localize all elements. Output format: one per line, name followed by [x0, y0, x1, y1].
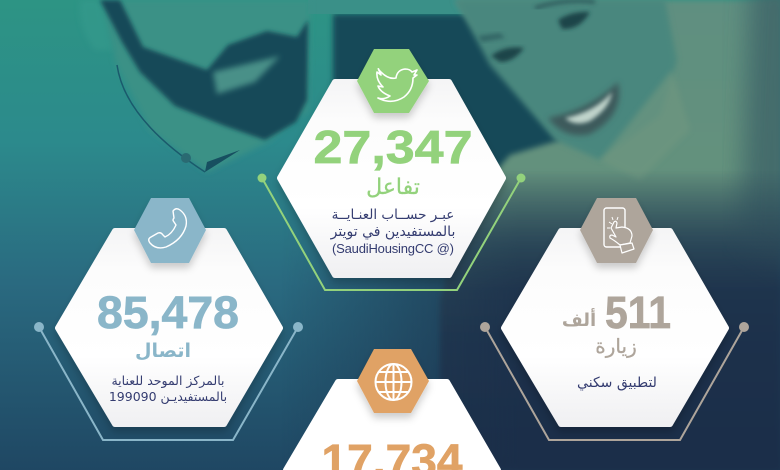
- card: Sakani app visits: [480, 198, 749, 440]
- window behind the people: [330, 14, 558, 168]
- icon: twitter bird: [357, 49, 429, 113]
- connector line blue: [34, 322, 303, 440]
- unit: ألف: [562, 308, 596, 331]
- white hexagon: [280, 82, 503, 275]
- label: تفاعل: [366, 175, 420, 200]
- woman: hijab, face and smile: [440, 0, 780, 470]
- man: face, beard and collar: [80, 0, 310, 172]
- description: بالمستفيدين في تويتر: [330, 224, 455, 240]
- white hexagon: [286, 382, 498, 470]
- connector line green: [258, 174, 526, 290]
- number: 27,347: [314, 121, 472, 173]
- description: بالمركز الموحد للعناية: [111, 373, 225, 389]
- icon: globe: [357, 349, 429, 413]
- description: (SaudiHousingCC @): [332, 241, 454, 256]
- card: website visits (cropped): [286, 349, 498, 470]
- card: Twitter interactions: [258, 49, 526, 290]
- white hexagon: [504, 231, 726, 424]
- description: بالمستفيديـن 199090: [109, 389, 227, 405]
- description: [330, 207, 455, 256]
- icon: tap on smartphone: [580, 198, 653, 263]
- number: 511: [605, 287, 671, 338]
- lower dark transition: [320, 184, 780, 470]
- description: [109, 373, 227, 405]
- number: 85,478: [97, 287, 239, 338]
- icon: telephone: [134, 198, 206, 263]
- label: زيارة: [595, 334, 637, 358]
- label: اتصال: [135, 340, 191, 362]
- description: عبـر حســاب العنـايــة: [332, 207, 454, 223]
- card: phone calls: [34, 198, 303, 440]
- white hexagon: [58, 231, 280, 424]
- connector line taupe: [480, 322, 749, 440]
- description: لتطبيق سكني: [577, 375, 657, 391]
